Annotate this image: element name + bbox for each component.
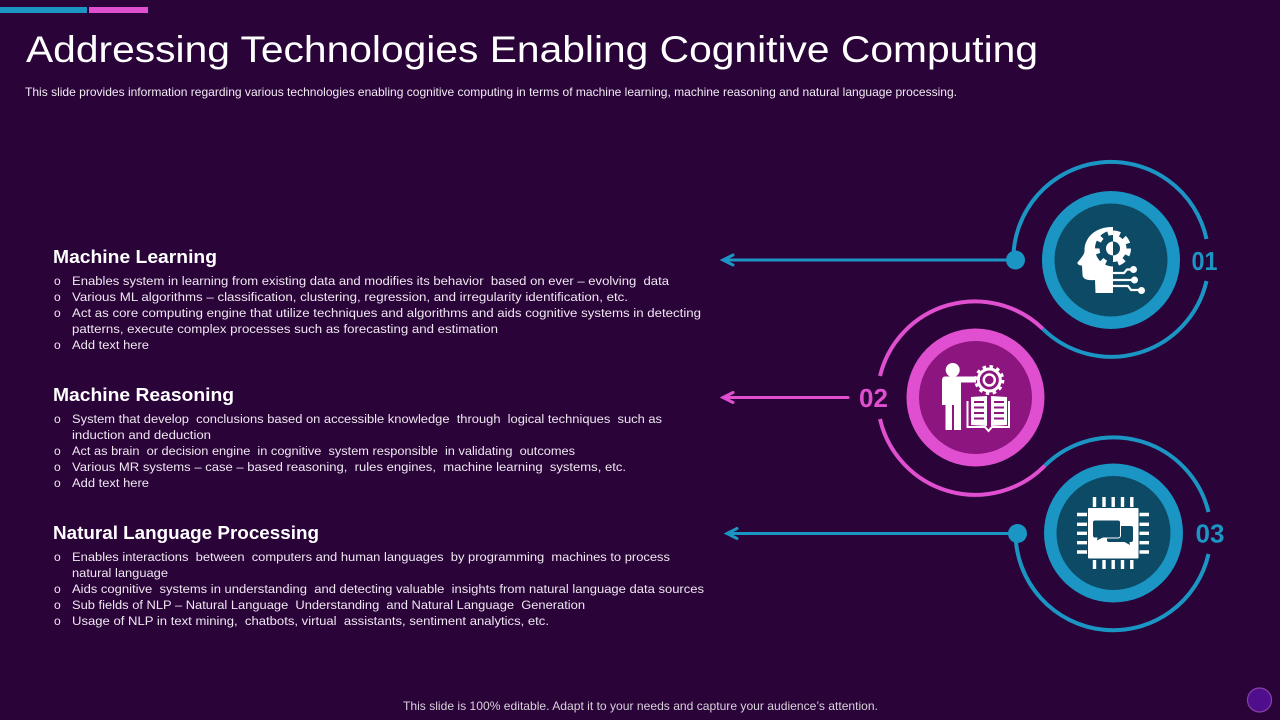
bullet list: natural language processing <box>54 550 704 628</box>
ring arcs 02 <box>880 301 1045 495</box>
number 01: 01 <box>1192 246 1218 276</box>
bullet list: machine learning: Enables system in learning from existing data and modifies its behavior based on ever – evolving data <box>72 274 669 288</box>
bullet list: natural language processing: o <box>54 550 61 564</box>
bullet list: machine reasoning: o <box>54 412 61 426</box>
heading: machine reasoning: Machine Reasoning <box>53 384 234 405</box>
bullet list: machine learning: o <box>54 306 61 320</box>
step 01 ring and badge <box>1006 162 1218 357</box>
bullet list: machine learning: Add text here <box>72 338 149 352</box>
heading: machine learning: Machine Learning <box>53 246 217 267</box>
bullet list: machine reasoning: Various MR systems – case – based reasoning, rules engines, machine learning systems, etc. <box>72 460 626 474</box>
bullet list: machine reasoning: o <box>54 460 61 474</box>
number 03: 03 <box>1196 518 1224 548</box>
ring arcs 01 <box>1013 162 1206 357</box>
connector dot 01 <box>1006 250 1025 270</box>
corner button <box>1248 688 1272 712</box>
panel: machine learning text <box>53 246 701 352</box>
bullet list: machine reasoning: Add text here <box>72 476 149 490</box>
bullet list: machine reasoning <box>54 412 662 490</box>
bullet list: machine learning: o <box>54 338 61 352</box>
bullet list: machine learning: o <box>54 290 61 304</box>
number 02: 02 <box>859 383 888 413</box>
badge circle 01 <box>1042 191 1180 329</box>
top accent bars <box>0 7 148 13</box>
bullet list: natural language processing: o <box>54 614 61 628</box>
bullet list: machine reasoning: System that develop conclusions based on accessible knowledge through logical techniques such as <box>72 412 662 426</box>
panel: machine reasoning text <box>53 384 662 490</box>
panel: natural language processing text <box>53 522 704 628</box>
icon: person with gear and book <box>942 363 1009 431</box>
subtitle: This slide provides information regarding various technologies enabling cognitive computing in terms of machine learning, machine reasoning and natural language processing. <box>25 85 957 99</box>
bullet list: machine learning <box>54 274 701 352</box>
bullet list: natural language processing: o <box>54 582 61 596</box>
badge circle 03 <box>1044 464 1183 602</box>
heading: natural language processing: Natural Language Processing <box>53 522 319 543</box>
step 02 ring and badge <box>859 301 1045 495</box>
bullet list: natural language processing: Sub fields of NLP – Natural Language Understanding and Natural Language Generation <box>72 598 585 612</box>
bullet list: natural language processing: natural language <box>72 566 168 580</box>
bullet list: machine reasoning: induction and deduction <box>72 428 211 442</box>
bullet list: machine reasoning: Act as brain or decision engine in cognitive system responsible in validating outcomes <box>72 444 575 458</box>
icon: chip with chat bubbles <box>1077 497 1149 569</box>
bullet list: machine learning: Act as core computing engine that utilize techniques and algorithms and aids cognitive systems in detecting <box>72 306 701 320</box>
bullet list: machine learning: o <box>54 274 61 288</box>
bullet list: natural language processing: Enables interactions between computers and human languages by programming machines to process <box>72 550 670 564</box>
icon: head with gear and circuits <box>1077 227 1145 294</box>
badge circle 02 <box>906 328 1044 466</box>
bullet list: natural language processing: o <box>54 598 61 612</box>
step 03 ring and badge <box>1008 437 1224 630</box>
arrow: machine learning <box>723 255 1015 265</box>
arrow: natural language processing <box>727 528 1017 538</box>
connector dot 03 <box>1008 524 1027 543</box>
arrow: machine reasoning <box>723 392 848 402</box>
footer note: This slide is 100% editable. Adapt it to your needs and capture your audience’s attention. <box>403 699 878 713</box>
bullet list: natural language processing: Usage of NLP in text mining, chatbots, virtual assistants, sentiment analytics, etc. <box>72 614 549 628</box>
ring arcs 03 <box>1016 437 1208 630</box>
title: Addressing Technologies Enabling Cognitive Computing <box>26 29 1038 70</box>
bullet list: natural language processing: Aids cognitive systems in understanding and detecting valuable insights from natural language data sources <box>72 582 704 596</box>
bullet list: machine learning: Various ML algorithms – classification, clustering, regression, and irregularity identification, etc. <box>72 290 628 304</box>
bullet list: machine learning: patterns, execute complex processes such as forecasting and estimation <box>72 322 498 336</box>
bullet list: machine reasoning: o <box>54 476 61 490</box>
bullet list: machine reasoning: o <box>54 444 61 458</box>
